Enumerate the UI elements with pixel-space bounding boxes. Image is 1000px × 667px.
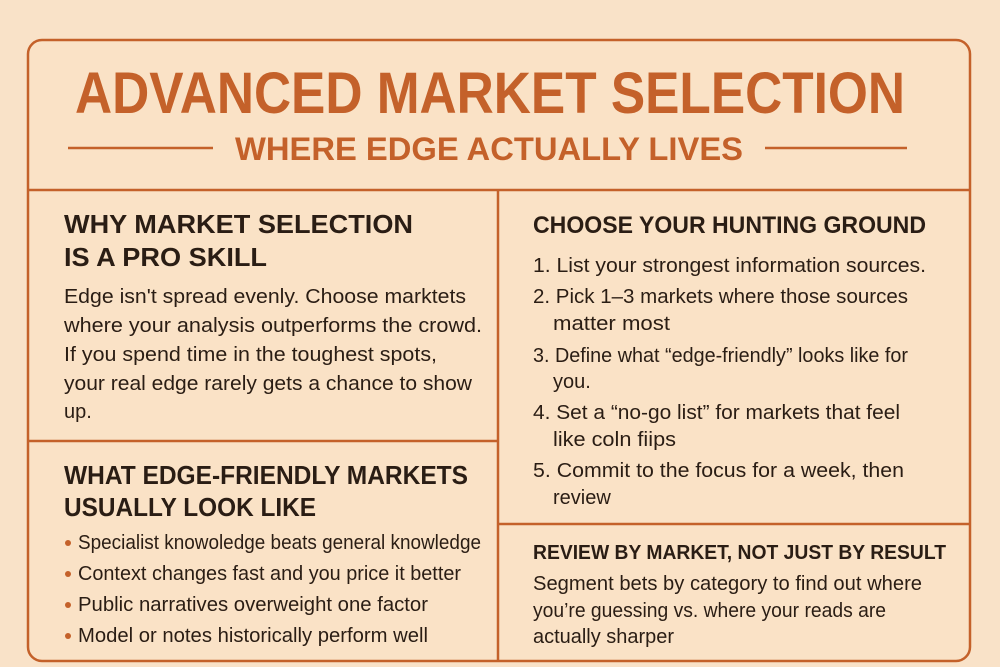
bullet list: Model or notes historically perform well (78, 625, 428, 647)
numbered list: 5. Commit to the focus for a week, then (533, 460, 904, 482)
body text: where your analysis outperforms the crowd. (63, 315, 482, 337)
title: ADVANCED MARKET SELECTION (75, 61, 905, 126)
heading: edge-friendly: USUALLY LOOK LIKE (64, 492, 316, 522)
bullet list (65, 532, 481, 647)
panel: edge-friendly markets (64, 460, 481, 647)
numbered list (533, 255, 926, 509)
numbered list: you. (553, 371, 591, 393)
panel: review by market (533, 542, 946, 648)
body text: Segment bets by category to find out where (533, 573, 922, 595)
numbered list: 4. Set a “no-go list” for markets that feel (533, 402, 900, 424)
heading: why market selection: IS A PRO SKILL (64, 242, 267, 272)
heading: review: REVIEW BY MARKET, NOT JUST BY RESULT (533, 542, 946, 564)
heading: why market selection: WHY MARKET SELECTION (64, 209, 413, 239)
body text: actually sharper (533, 626, 674, 648)
body text: your real edge rarely gets a chance to show (64, 373, 473, 395)
panel: why market selection (63, 209, 482, 423)
body text (533, 573, 922, 648)
heading: hunting ground: CHOOSE YOUR HUNTING GROUND (533, 212, 926, 239)
numbered list: like coln fiips (553, 429, 676, 451)
body text: up. (64, 401, 92, 423)
bullet list: Context changes fast and you price it better (78, 563, 461, 585)
numbered list: review (553, 487, 611, 509)
bullet list: Public narratives overweight one factor (78, 594, 428, 616)
body text: you’re guessing vs. where your reads are (533, 600, 886, 622)
bullet list: Specialist knowoledge beats general knowledge (78, 532, 481, 554)
panel: hunting ground (533, 212, 926, 509)
body text (63, 286, 482, 423)
numbered list: 2. Pick 1–3 markets where those sources (533, 286, 908, 308)
subtitle: WHERE EDGE ACTUALLY LIVES (235, 131, 743, 167)
heading: edge-friendly (64, 460, 468, 522)
numbered list: 1. List your strongest information sources. (533, 255, 926, 277)
body text: If you spend time in the toughest spots, (64, 344, 437, 366)
numbered list: 3. Define what “edge-friendly” looks like for (533, 345, 908, 367)
numbered list: matter most (553, 313, 670, 335)
heading: edge-friendly: WHAT EDGE-FRIENDLY MARKETS (64, 460, 468, 490)
heading: why market selection (64, 209, 413, 272)
body text: Edge isn't spread evenly. Choose marktets (64, 286, 466, 308)
